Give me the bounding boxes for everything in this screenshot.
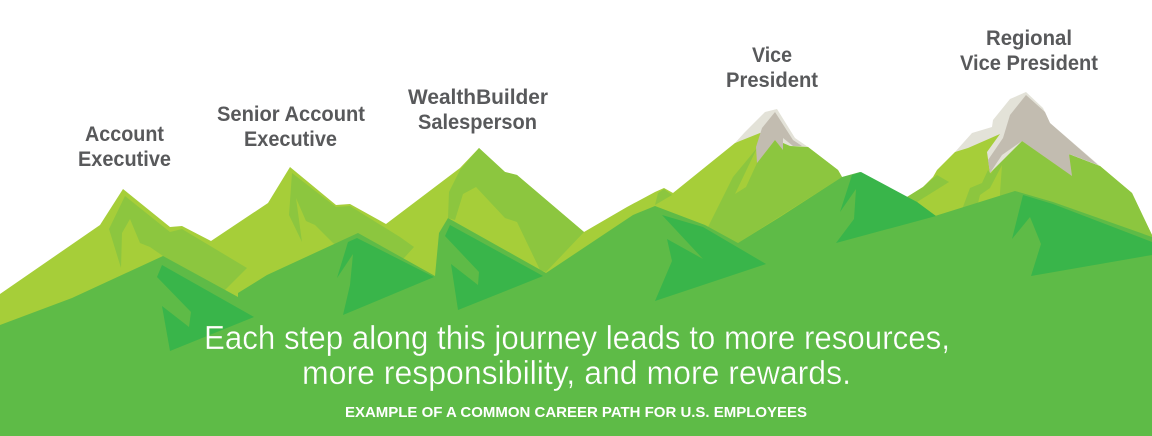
- foreground hills: [0, 172, 1152, 436]
- label: Regional Vice President: Vice President: [960, 51, 1098, 75]
- foreground hill 6 dark facet: [1012, 195, 1152, 276]
- label: Regional Vice President: [960, 26, 1098, 75]
- foreground hill 1 dark facet: [157, 265, 254, 351]
- label: Vice President: Vice: [752, 43, 792, 67]
- mountain 5 left shaded ridge: [907, 175, 949, 202]
- foreground hill 3 dark facet: [445, 225, 543, 310]
- label: Vice President: [726, 43, 818, 92]
- label: Account Executive: [78, 122, 171, 171]
- foreground hill 4 dark facet: [655, 215, 766, 301]
- foreground hill 2 dark facet: [337, 238, 434, 315]
- caption: EXAMPLE OF A COMMON CAREER PATH FOR U.S. EMPLOYEES: [345, 404, 807, 421]
- label: Account Executive: Executive: [78, 147, 171, 171]
- label: WealthBuilder Salesperson: WealthBuilder: [408, 85, 549, 109]
- mountain 1 shaded face: [109, 196, 247, 290]
- label: Senior Account Executive: Executive: [244, 127, 337, 151]
- label: Regional Vice President: Regional: [986, 26, 1072, 50]
- label: WealthBuilder Salesperson: [408, 85, 549, 134]
- main message: Each step along this journey leads to more resources,: [204, 319, 950, 356]
- mountain 5 rock and snow cap: [955, 92, 1100, 176]
- label: Senior Account Executive: Senior Account: [217, 102, 365, 126]
- mountain 2 shaded face: [289, 173, 414, 270]
- mountain 3 shaded face: [448, 148, 584, 272]
- mountain 5 shaded face: [960, 141, 1152, 260]
- label: WealthBuilder Salesperson: Salesperson: [418, 110, 537, 134]
- main message: [204, 319, 950, 391]
- label: Vice President: President: [726, 68, 818, 92]
- foreground hill 5 dark facet: [836, 172, 936, 243]
- small ridge between mountains 3 and 4: [655, 189, 672, 205]
- main message: more responsibility, and more rewards.: [302, 354, 851, 391]
- mountain 4 rock and snow cap: [735, 109, 808, 163]
- mountain 4 shaded face: [708, 138, 842, 243]
- label: Senior Account Executive: [217, 102, 365, 151]
- back mountains: lime silhouette: [0, 130, 1152, 330]
- label: Account Executive: Account: [85, 122, 164, 146]
